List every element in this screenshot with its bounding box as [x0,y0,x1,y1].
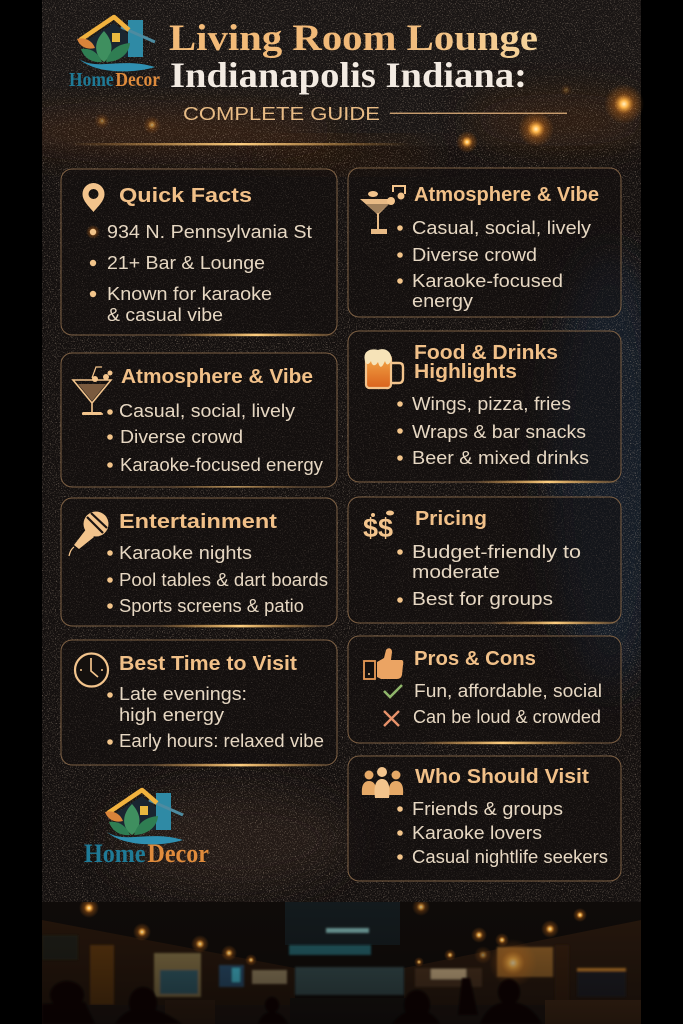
list [107,543,328,616]
heading: Best Time to Visit [119,652,297,675]
list [397,799,608,867]
list: 934 N. Pennsylvania St [107,222,312,242]
list: Diverse crowd [412,245,537,265]
list [397,394,589,468]
heading: Pricing [415,507,487,530]
panel: atmosphere and vibe (right) [348,168,621,317]
heading: Atmosphere & Vibe [414,183,599,206]
list: Beer & mixed drinks [412,448,589,468]
subtitle: COMPLETE GUIDE [183,104,380,124]
icon: martini glass [73,367,112,415]
icon: thumbs up [364,648,403,679]
header glow line [70,143,410,145]
list: Karaoke nights [119,543,252,563]
list: Friends & groups [412,799,563,819]
heading: Food & Drinks [414,341,558,364]
list: Diverse crowd [120,427,243,447]
list [397,218,591,311]
icon: martini glass with music note [360,186,405,234]
title line 1: Living Room Lounge [169,18,538,59]
list [86,222,312,325]
panel: food and drinks highlights [348,331,621,483]
logo wordmark: HomeDecor [69,69,160,91]
list [397,542,581,609]
icon: house and leaves [77,17,155,71]
text: con: Can be loud & crowded [413,707,601,727]
list: Pool tables & dart boards [119,570,328,590]
list: Early hours: relaxed vibe [119,731,324,751]
panel: pricing [348,497,621,624]
list: Karaoke-focused energy [120,455,323,475]
panel: who should visit [348,756,621,881]
list [107,401,323,475]
heading: Quick Facts [119,184,252,207]
heading: Pros & Cons [414,647,536,670]
icon: cross mark [384,711,399,726]
panel: best time to visit [61,640,337,766]
list: high energy [119,705,224,725]
footer photo: lounge interior [42,898,641,1024]
list: moderate [412,562,500,582]
icon: check mark [384,685,402,697]
list: & casual vibe [107,305,223,325]
logo: top Home Decor [69,17,160,91]
list: Budget-friendly to [412,542,581,562]
icon: dollar signs: $$ [363,513,393,543]
logo wordmark: HomeDecor [84,839,209,868]
header bokeh lights [94,84,644,153]
heading: Highlights [414,360,517,383]
list: 21+ Bar & Lounge [107,253,265,273]
list: Casual, social, lively [119,401,295,421]
icon: location pin [82,183,104,212]
title [169,18,538,124]
heading: Entertainment [119,510,277,533]
list: Wings, pizza, fries [412,394,571,414]
list: energy [412,291,473,311]
panel: entertainment [61,498,337,627]
icon: beer mug [364,349,403,388]
icon: clock [75,654,108,686]
list: Karaoke-focused [412,271,563,291]
logo: bottom Home Decor [84,790,209,868]
list: Late evenings: [119,684,247,704]
panel: quick facts [61,169,337,336]
heading: Who Should Visit [415,765,589,788]
text: pro: Fun, affordable, social [414,681,602,701]
list [107,684,324,751]
list: Best for groups [412,589,553,609]
list: Karaoke lovers [412,823,542,843]
heading [414,341,558,383]
heading: Atmosphere & Vibe [121,365,313,388]
list: Sports screens & patio [119,596,304,616]
list: Wraps & bar snacks [412,422,586,442]
title line 2: Indianapolis Indiana: [170,55,527,95]
list: Casual nightlife seekers [412,847,608,867]
icon: microphone [69,512,108,556]
panel: atmosphere and vibe (left) [61,353,337,488]
panel: pros and cons [348,636,621,744]
icon: group of people [362,767,403,798]
list: Casual, social, lively [412,218,591,238]
icon: house and leaves [105,790,183,844]
list: Known for karaoke [107,284,272,304]
